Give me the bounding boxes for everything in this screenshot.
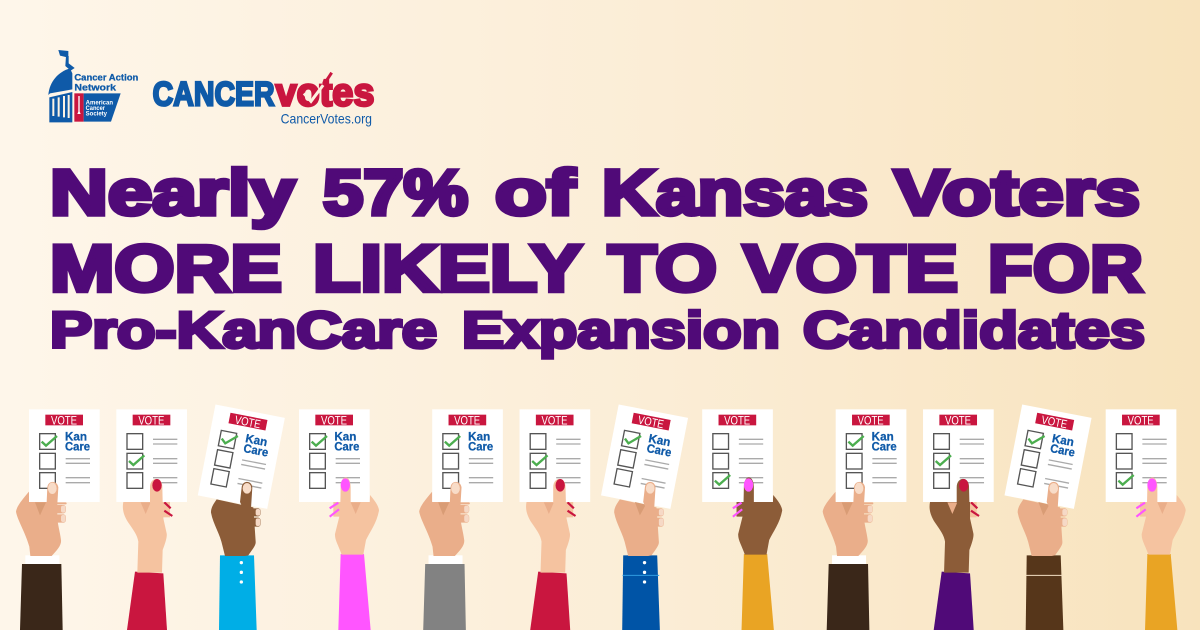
- voter 7: Care: [646, 441, 673, 460]
- icon: capitol dome: [48, 50, 75, 122]
- voter 2: VOTE: [138, 414, 165, 427]
- voter 1: Kan: [65, 430, 87, 444]
- logo: CancerVotes: CancerVotes.org: [281, 111, 372, 127]
- voter 4: Kan: [334, 430, 356, 444]
- heading line 3: Expansion: [462, 302, 780, 358]
- voter 8: [702, 409, 782, 630]
- voter 4: [299, 409, 379, 630]
- title: [50, 156, 1145, 358]
- logo: CancerVotes: [153, 72, 374, 127]
- group of four voters, right: [823, 404, 1186, 630]
- heading line 3: Candidates: [803, 302, 1145, 358]
- heading line 2: LIKELY: [313, 232, 582, 305]
- voter 9: [823, 409, 906, 630]
- voter 7: Kan: [647, 431, 672, 449]
- voter 5: Kan: [468, 430, 490, 444]
- heading line 2: TO: [608, 232, 717, 305]
- voter 5: [419, 409, 503, 630]
- heading line 1: Voters: [894, 156, 1140, 228]
- voter 1: [16, 409, 100, 630]
- voter 4: Care: [334, 440, 360, 454]
- voter 6: [520, 409, 590, 630]
- voter 3: [198, 404, 285, 630]
- voter 9: Kan: [872, 430, 894, 444]
- voter 7: [601, 404, 688, 630]
- voter 8: VOTE: [724, 414, 750, 427]
- voter 12: [1106, 409, 1186, 630]
- heading line 1: Kansas: [602, 156, 868, 228]
- text: Cancer Action Network: Network: [74, 82, 117, 92]
- voter 5: Care: [468, 440, 494, 454]
- voter 6: VOTE: [542, 414, 568, 427]
- text: Cancer Action Network: [74, 73, 139, 92]
- voter 10: [923, 409, 994, 630]
- voter 5: VOTE: [454, 414, 480, 427]
- voter 12: VOTE: [1128, 414, 1154, 427]
- logo: CancerVotes: votes: [276, 72, 374, 115]
- logo: CancerVotes: CANCER: [153, 75, 275, 113]
- heading line 2: MORE: [50, 232, 282, 305]
- heading line 1: 57%: [323, 156, 468, 228]
- group of four voters, left: [16, 404, 379, 630]
- icon: American Cancer Society badge: Cancer: [86, 106, 106, 112]
- voter 11: Kan: [1051, 431, 1075, 449]
- icon: American Cancer Society badge: Society: [86, 112, 108, 118]
- heading line 1: of: [495, 156, 576, 228]
- voter 1: Care: [65, 440, 90, 454]
- voter 11: Care: [1049, 441, 1077, 460]
- icon: American Cancer Society badge: American: [86, 100, 113, 106]
- heading line 3: [50, 302, 1145, 358]
- heading line 1: [50, 156, 1140, 228]
- text: Cancer Action Network: Cancer Action: [74, 73, 139, 83]
- voter 3: Kan: [244, 431, 269, 449]
- voter 2: [116, 409, 187, 630]
- voter 4: VOTE: [321, 414, 347, 427]
- heading line 2: VOTE: [743, 232, 958, 305]
- voter 11: VOTE: [1040, 414, 1069, 431]
- heading line 2: FOR: [988, 232, 1143, 305]
- heading line 1: Nearly: [50, 156, 296, 228]
- heading line 3: Pro-KanCare: [50, 302, 437, 358]
- logo: Cancer Action Network: [48, 50, 139, 122]
- group of four voters, centre: [419, 404, 782, 630]
- voter 3: Care: [242, 441, 270, 460]
- voter 9: Care: [872, 440, 897, 454]
- voter 3: VOTE: [234, 414, 262, 431]
- voter 1: VOTE: [51, 414, 77, 427]
- voter 10: VOTE: [945, 414, 971, 427]
- voter 11: [1005, 404, 1092, 630]
- icon: American Cancer Society badge: [74, 93, 121, 122]
- heading line 2: [50, 232, 1143, 305]
- voter 7: VOTE: [637, 414, 665, 431]
- voter 9: VOTE: [858, 414, 884, 427]
